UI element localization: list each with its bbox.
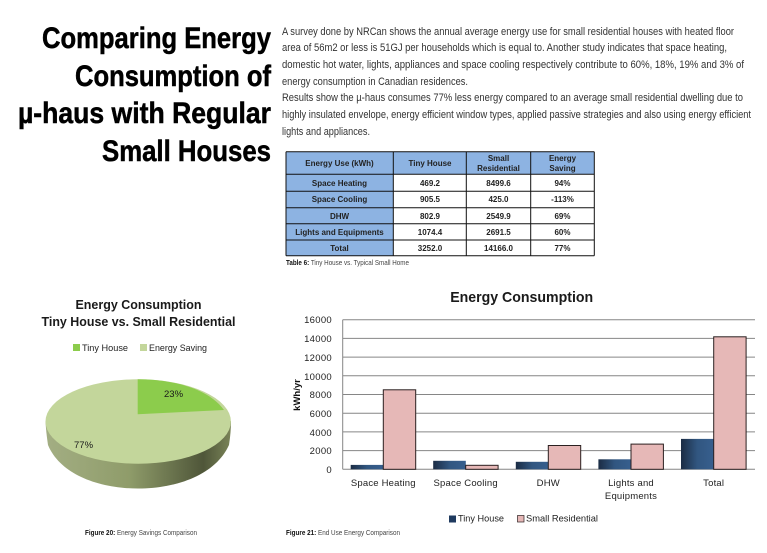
category labels: DHW	[537, 478, 560, 489]
bar legend: Tiny House	[458, 514, 504, 524]
data table: DHW	[330, 212, 350, 221]
table caption: Table 6: Tiny House vs. Typical Small Home	[286, 258, 409, 267]
pie legend	[73, 343, 207, 354]
title: Small Houses	[102, 135, 271, 168]
data table: 425.0	[488, 195, 509, 204]
small residential bars	[383, 337, 746, 469]
y axis labels: 0	[326, 465, 332, 476]
title: Comparing Energy	[42, 22, 271, 55]
pie legend: Energy Saving	[149, 343, 207, 354]
data table: 802.9	[420, 212, 441, 221]
pie caption: Figure 20: Energy Savings Comparison	[85, 528, 197, 537]
y axis labels: 4000	[310, 428, 332, 439]
tiny house bars	[351, 439, 714, 469]
data table: Lights and Equipments	[295, 228, 384, 237]
body text: energy consumption in Canadian residences.	[282, 76, 468, 88]
data table: 94%	[554, 179, 571, 188]
data table: 1074.4	[418, 228, 443, 237]
bar caption: Figure 21: End Use Energy Comparison	[286, 528, 400, 537]
data table: Residential	[477, 164, 520, 173]
data table: 469.2	[420, 179, 441, 188]
data table: Energy Use (kWh)	[305, 159, 374, 168]
y axis labels	[304, 315, 332, 476]
category labels: Space Heating	[351, 478, 416, 489]
pie legend: Tiny House	[82, 343, 128, 354]
data table: Small	[488, 154, 509, 163]
y axis labels: 8000	[310, 390, 332, 401]
category labels	[351, 478, 724, 502]
data table: 2691.5	[486, 228, 511, 237]
y axis labels: 2000	[310, 446, 332, 457]
data table: Energy	[549, 154, 577, 163]
title: µ-haus with Regular	[18, 97, 271, 130]
body text	[282, 26, 751, 138]
data table: 2549.9	[486, 212, 511, 221]
data table: Total	[330, 244, 349, 253]
pie chart	[46, 379, 231, 488]
data table: 60%	[554, 228, 571, 237]
data table: 905.5	[420, 195, 441, 204]
y axis labels: 14000	[304, 334, 332, 345]
data table: 14166.0	[484, 244, 514, 253]
data table: 77%	[554, 244, 571, 253]
y axis title: kWh/yr	[292, 379, 303, 411]
category labels: Equipments	[605, 491, 657, 502]
y axis labels: 6000	[310, 409, 332, 420]
y axis labels: 12000	[304, 353, 332, 364]
pie chart title: Tiny House vs. Small Residential	[42, 314, 236, 329]
bar legend	[449, 514, 598, 524]
title: Consumption of	[75, 60, 272, 93]
data table: 3252.0	[418, 244, 443, 253]
category labels: Lights and	[608, 478, 654, 489]
data table: 69%	[554, 212, 571, 221]
y axis labels: 16000	[304, 315, 332, 326]
pie chart title: Energy Consumption	[76, 297, 202, 312]
bar legend: Small Residential	[526, 514, 598, 524]
title	[18, 22, 272, 168]
data table: Tiny House	[409, 159, 452, 168]
bar chart title: Energy Consumption	[450, 289, 593, 306]
category labels: Space Cooling	[433, 478, 498, 489]
data table: -113%	[551, 195, 574, 204]
pie chart: 77%	[74, 440, 94, 451]
pie chart title	[42, 297, 236, 329]
category labels: Total	[703, 478, 724, 489]
data table: Saving	[549, 164, 576, 173]
body text: lights and appliances.	[282, 126, 370, 138]
body text: area of 56m2 or less is 51GJ per households which is equal to. Another study indicates that space heating,	[282, 42, 727, 54]
data table	[286, 152, 594, 256]
pie chart: 23%	[164, 389, 184, 400]
bar chart	[292, 315, 755, 502]
data table: 8499.6	[486, 179, 511, 188]
y axis labels: 10000	[304, 372, 332, 383]
data table: Space Cooling	[312, 195, 367, 204]
data table: Space Heating	[312, 179, 367, 188]
